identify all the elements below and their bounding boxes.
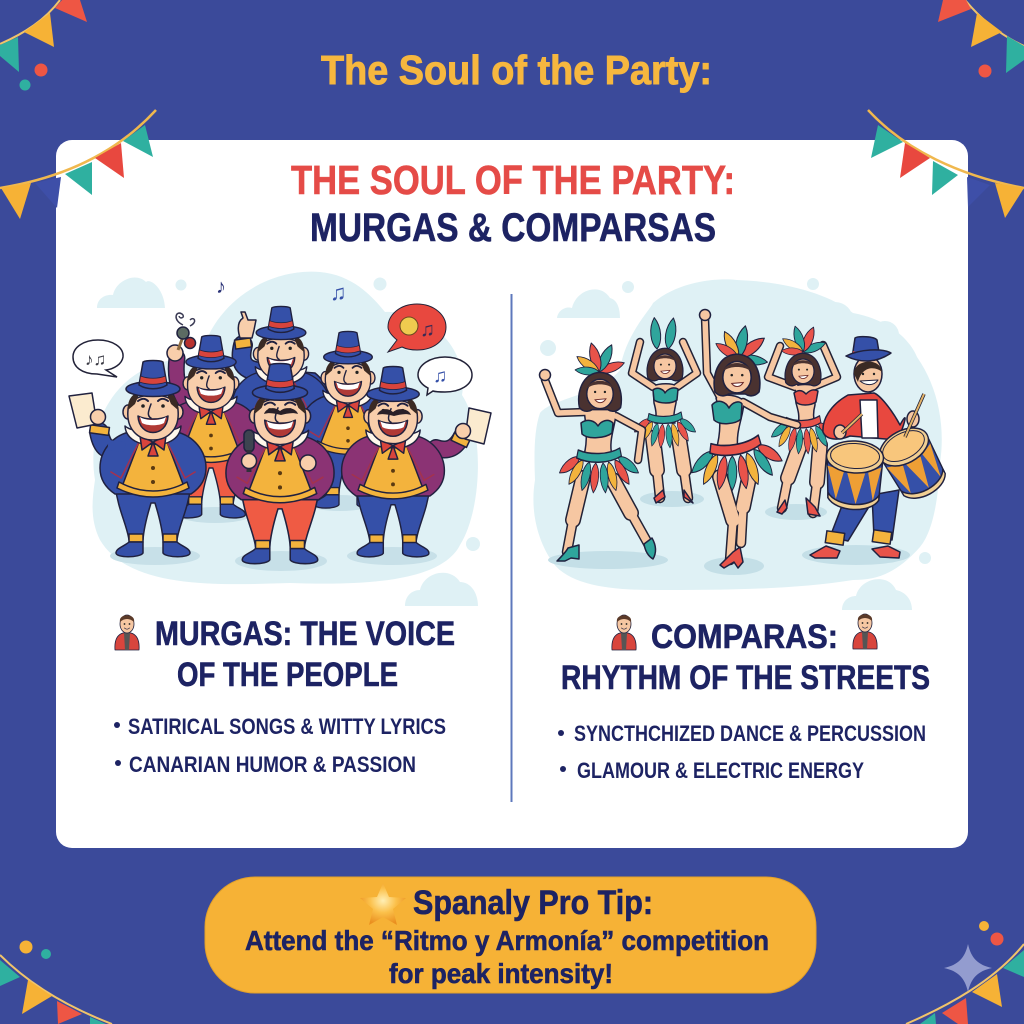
bunting: top left corner xyxy=(0,0,87,90)
card heading: MURGAS & COMPARSAS xyxy=(310,206,716,250)
pro tip pill xyxy=(205,877,816,993)
icon: avatar left xyxy=(612,615,636,650)
singer back left with maraca xyxy=(162,313,260,518)
pro tip pill: for peak intensity! xyxy=(389,958,613,989)
music notes: ♫ xyxy=(330,280,346,305)
pro tip pill: Spanaly Pro Tip: xyxy=(413,884,653,922)
murgas bullet list: SATIRICAL SONGS & WITTY LYRICS xyxy=(128,714,446,739)
speech bubble: notes right: ♫ xyxy=(433,366,447,387)
singer back right xyxy=(300,331,396,508)
singer front left with paper xyxy=(69,360,206,557)
clouds and dots xyxy=(540,278,931,610)
clouds and dots xyxy=(97,278,480,606)
section: comparsas heading xyxy=(561,614,930,697)
murgas bullet list xyxy=(114,714,446,777)
singer front center with microphone xyxy=(226,364,334,564)
bunting: top right corner xyxy=(938,0,1024,78)
bunting and sparkle: bottom right corner xyxy=(906,921,1024,1024)
main white card xyxy=(56,140,968,848)
icon: avatar xyxy=(115,615,139,650)
speech bubble: notes right xyxy=(418,357,472,395)
dancer 1 xyxy=(540,342,656,561)
card heading xyxy=(291,157,735,250)
bunting: left over card corner xyxy=(0,110,156,219)
speech bubble: notes left: ♪♫ xyxy=(85,350,106,369)
dancer 3 center xyxy=(687,310,797,568)
murgas background blob xyxy=(93,272,478,584)
section: comparsas heading: RHYTHM OF THE STREETS xyxy=(561,659,930,697)
section: comparsas heading: COMPARAS: xyxy=(651,618,838,656)
drummer xyxy=(810,337,952,558)
foot shadows xyxy=(110,495,437,571)
section: murgas heading: MURGAS: THE VOICE xyxy=(155,615,455,653)
singer front right with paper xyxy=(342,366,491,557)
foot shadows xyxy=(548,491,910,575)
comparsas bullet list xyxy=(558,721,926,783)
center divider xyxy=(510,294,512,802)
bunting: bottom left corner xyxy=(0,940,112,1024)
comparsas bullet list: SYNCTHCHIZED DANCE & PERCUSSION xyxy=(574,721,926,746)
speech bubble: red with face: ♫ xyxy=(420,319,435,341)
icon: avatar right xyxy=(853,614,877,649)
dancer 2 xyxy=(632,317,697,503)
page title: The Soul of the Party: xyxy=(321,47,712,93)
icon: star xyxy=(360,883,406,925)
illustration: murgas singers xyxy=(69,272,491,606)
illustration: comparsas dancers and drummer xyxy=(533,278,952,610)
dancer 4 xyxy=(768,324,837,516)
bunting: right over card corner xyxy=(868,110,1024,218)
speech bubble: notes left xyxy=(73,340,123,377)
section: murgas heading xyxy=(115,615,455,694)
section: murgas heading: OF THE PEOPLE xyxy=(177,656,398,694)
music note: ♪ xyxy=(216,276,226,298)
pro tip pill: Attend the “Ritmo y Armonía” competition xyxy=(245,925,769,956)
comparsas bullet list: GLAMOUR & ELECTRIC ENERGY xyxy=(577,758,864,783)
comparsas background blob xyxy=(533,279,942,590)
card heading: THE SOUL OF THE PARTY: xyxy=(291,157,735,203)
speech bubble: red with face xyxy=(388,304,446,352)
singer back middle xyxy=(232,306,331,487)
murgas bullet list: CANARIAN HUMOR & PASSION xyxy=(129,752,416,777)
